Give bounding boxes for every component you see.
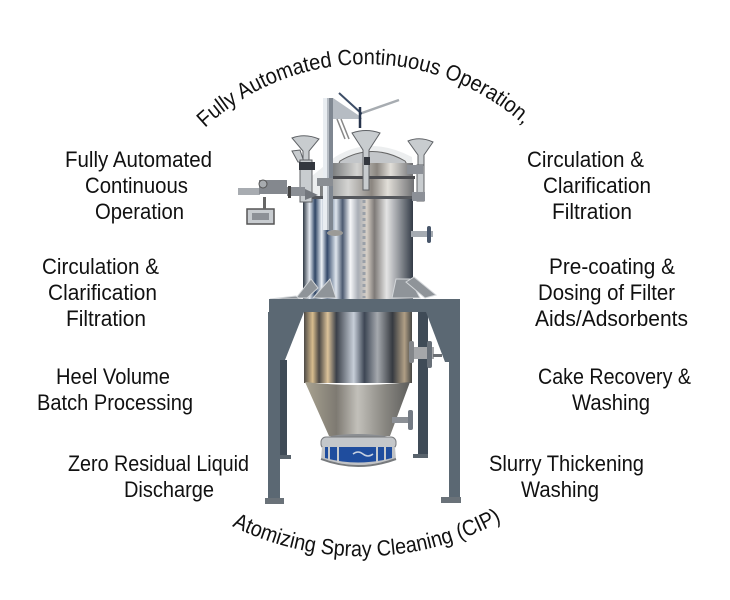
label: slurry thickening xyxy=(489,451,644,502)
vessel seam xyxy=(362,200,366,298)
label: pre-coating: Aids/Adsorbents xyxy=(535,306,688,331)
top gussets xyxy=(270,277,436,299)
label: circulation right: Clarification xyxy=(543,173,651,198)
label: circulation right: Filtration xyxy=(552,199,632,224)
label: fully automated: Fully Automated xyxy=(65,147,212,172)
label: pre-coating: Dosing of Filter xyxy=(538,280,675,305)
label: pre-coating: Pre-coating & xyxy=(549,254,675,279)
vessel head xyxy=(305,146,415,199)
vertical arm and bracket xyxy=(317,93,399,236)
label: heel volume: Batch Processing xyxy=(37,390,193,415)
label: fully automated: Continuous xyxy=(85,173,188,198)
upper vessel shell xyxy=(303,198,413,299)
outlet flange xyxy=(321,434,396,466)
filter vessel illustration xyxy=(238,93,461,504)
label: zero residual: Zero Residual Liquid xyxy=(68,451,249,476)
label: cake recovery: Cake Recovery & xyxy=(538,364,691,389)
lower nozzle xyxy=(409,341,442,368)
label: fully automated: Operation xyxy=(95,199,184,224)
cone nozzle xyxy=(392,410,413,430)
label: circulation right: Circulation & xyxy=(527,147,644,172)
clamp blocks xyxy=(299,157,425,201)
label: slurry thickening: Washing xyxy=(521,477,599,502)
label: fully automated xyxy=(65,147,212,224)
label: circulation left xyxy=(42,254,159,331)
curved caption: bottom: Atomizing Spray Cleaning (CIP) xyxy=(232,508,500,561)
back frame legs xyxy=(277,312,428,459)
support frame xyxy=(265,299,461,504)
clamp handles xyxy=(292,130,433,202)
left feature labels xyxy=(37,147,249,502)
label: cake recovery: Washing xyxy=(572,390,650,415)
cone xyxy=(305,382,410,436)
side actuator assembly xyxy=(238,180,318,224)
label: circulation left: Circulation & xyxy=(42,254,159,279)
label: circulation left: Filtration xyxy=(66,306,146,331)
label: pre-coating xyxy=(535,254,688,331)
label: circulation right xyxy=(527,147,651,224)
label: cake recovery xyxy=(538,364,691,415)
label: circulation left: Clarification xyxy=(48,280,157,305)
right feature labels xyxy=(489,147,691,502)
label: zero residual xyxy=(68,451,249,502)
label: heel volume: Heel Volume xyxy=(56,364,170,389)
label: heel volume xyxy=(37,364,193,415)
label: zero residual: Discharge xyxy=(124,477,214,502)
side nozzle xyxy=(411,226,433,243)
lower vessel shell xyxy=(304,312,412,383)
label: slurry thickening: Slurry Thickening xyxy=(489,451,644,476)
curved heading: top: Fully Automated Continuous Operation, xyxy=(196,48,525,127)
